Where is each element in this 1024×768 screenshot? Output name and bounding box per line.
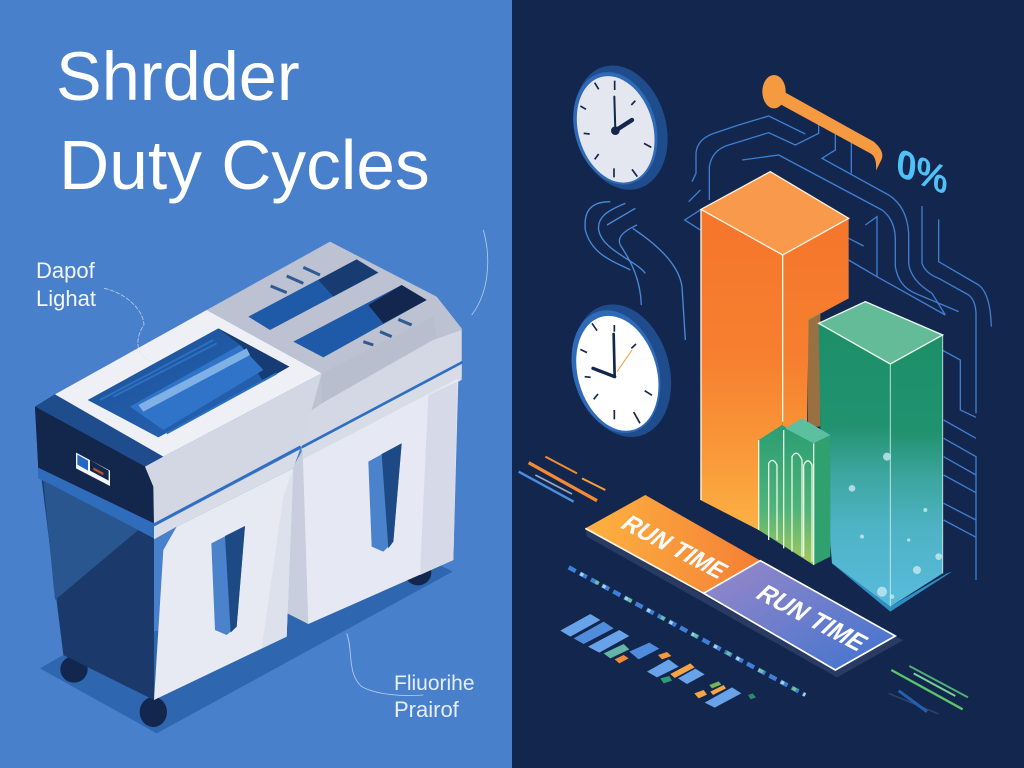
dark rear panel bbox=[35, 394, 163, 523]
label: upper left callout: Dapof bbox=[36, 258, 96, 283]
percent value: 0% bbox=[894, 140, 950, 204]
floor shadow bbox=[40, 560, 453, 733]
bar: small green bbox=[759, 418, 830, 565]
gauge: orange thermometer bbox=[762, 75, 882, 171]
left shredder unit bbox=[35, 310, 322, 700]
title: Shrdder bbox=[56, 38, 300, 115]
green status lines bbox=[889, 666, 968, 714]
plate shadow bbox=[585, 528, 904, 677]
side face of top bbox=[145, 373, 322, 525]
blue data blocks bbox=[560, 614, 741, 708]
orange status lines bbox=[519, 457, 605, 502]
small bar arches bbox=[759, 430, 814, 565]
right unit strip below trim bbox=[302, 363, 462, 462]
left panel background bbox=[0, 0, 512, 768]
upper clock hands bbox=[611, 97, 632, 135]
chart artwork: clocks, circuits, bars bbox=[558, 54, 991, 612]
blue band bbox=[38, 467, 154, 539]
right unit top bbox=[207, 242, 462, 450]
lower artwork: plate and dashes bbox=[519, 457, 968, 714]
label: upper left callout bbox=[36, 258, 96, 311]
lower clock ticks bbox=[580, 323, 652, 423]
callout leader lines bbox=[104, 230, 488, 696]
green bar right face bbox=[890, 335, 943, 607]
plate label: orange: RUN TIME bbox=[614, 512, 734, 584]
label: lower right callout: Fliuorihe bbox=[394, 672, 475, 695]
right unit handle slot bbox=[368, 443, 402, 552]
orange bar top bbox=[701, 172, 849, 255]
green bar base glow bbox=[832, 563, 952, 612]
clock: lower bbox=[558, 293, 686, 449]
clock: upper bbox=[560, 54, 682, 201]
bar: orange bbox=[700, 172, 849, 542]
circuit lines bbox=[685, 116, 991, 580]
plate label: blue: RUN TIME bbox=[749, 581, 874, 656]
orange bar right face bbox=[783, 218, 849, 542]
plate: blue segment bbox=[704, 561, 895, 670]
title: Duty Cycles bbox=[59, 126, 430, 204]
label: lower right callout: Prairof bbox=[394, 697, 460, 722]
upper clock face bbox=[565, 67, 667, 192]
bar: green bbox=[819, 302, 952, 612]
upper clock rim bbox=[560, 54, 682, 201]
green bar top bbox=[819, 302, 943, 364]
label: upper left callout: Lighat bbox=[36, 286, 96, 311]
right shredder unit bbox=[207, 242, 463, 624]
top surface bbox=[55, 310, 322, 457]
plate: orange segment bbox=[585, 495, 760, 593]
wheels bbox=[60, 560, 431, 727]
title bbox=[56, 38, 430, 204]
trim line bbox=[154, 447, 301, 525]
wavy flow lines bbox=[585, 202, 685, 340]
feed slot two bbox=[293, 285, 427, 357]
lower clock hands bbox=[617, 350, 632, 372]
right unit blue trim bbox=[302, 362, 463, 447]
lower strip bbox=[154, 449, 300, 539]
lower clock face bbox=[563, 306, 671, 441]
front bin panel bbox=[154, 468, 293, 700]
dark lower body bbox=[42, 480, 154, 700]
right panel background bbox=[512, 0, 1024, 768]
open hopper with paper bbox=[88, 328, 289, 437]
feed slot one bbox=[248, 259, 378, 330]
control panel bbox=[76, 453, 110, 486]
green bar specks bbox=[849, 453, 942, 599]
lower clock rim bbox=[558, 293, 686, 449]
orange and green data marks bbox=[615, 652, 756, 699]
green bar left face bbox=[819, 323, 890, 607]
speckled data row bbox=[569, 567, 805, 695]
orange bar left face bbox=[700, 209, 783, 542]
label: lower right callout bbox=[394, 672, 475, 722]
control marks bbox=[271, 267, 412, 345]
upper clock ticks bbox=[580, 81, 651, 177]
illustration: isometric shredder bbox=[35, 230, 488, 733]
left unit handle slot bbox=[211, 526, 245, 635]
right unit body bbox=[289, 378, 458, 624]
